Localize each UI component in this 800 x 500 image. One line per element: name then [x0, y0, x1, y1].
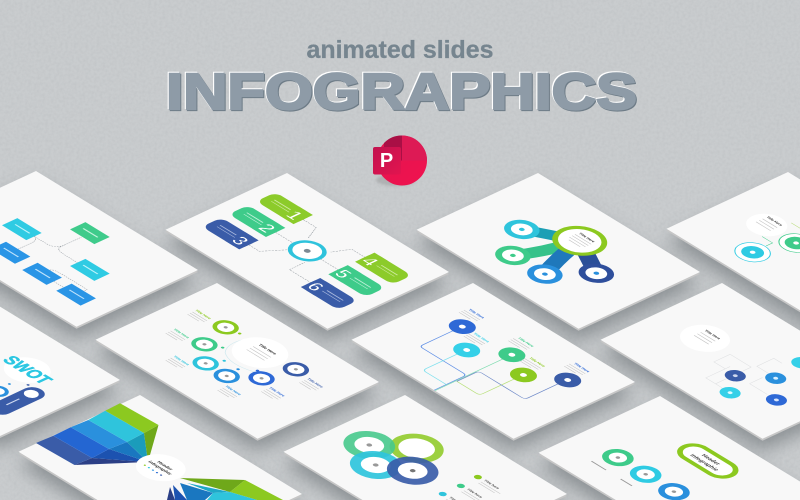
blue ring left	[0, 380, 20, 399]
icon: PowerPoint logo	[373, 135, 427, 186]
label cyan: Title Here	[172, 355, 190, 366]
lime pill heading: Header	[699, 454, 722, 467]
connector lines	[387, 323, 565, 419]
list item cyan	[434, 491, 471, 500]
list item lime	[470, 474, 506, 495]
disc navy	[376, 451, 449, 490]
label lime: Title Here	[528, 357, 546, 368]
node green	[493, 344, 531, 365]
node lime	[504, 365, 543, 385]
node blue	[520, 261, 570, 288]
pill 4: 4	[356, 254, 384, 269]
pill 1	[256, 192, 313, 224]
node cyan	[497, 216, 547, 243]
white SWOT ellipse	[0, 352, 60, 388]
center circle: Header	[156, 460, 174, 471]
label cyan	[464, 331, 490, 346]
white title ellipse: Title Here	[703, 329, 721, 340]
title: INFOGRAPHICS: INFOGRAPHICS	[165, 62, 636, 119]
list item green: Title here	[466, 488, 483, 499]
slide: metaball blob	[415, 173, 702, 331]
label lime: Title Here	[194, 309, 212, 320]
box: blue middle	[22, 263, 62, 285]
funnel left bands	[36, 403, 158, 465]
white title ellipse: Title Here	[765, 216, 783, 226]
center circle: infographic	[147, 460, 174, 476]
subtitle: animated slides: animated slides	[306, 36, 494, 64]
node cyan	[448, 340, 486, 360]
ring blue	[652, 480, 696, 500]
disc lime	[378, 428, 455, 469]
funnel left folded faces	[74, 425, 158, 465]
pill 6: 6	[302, 280, 330, 294]
disc cyan	[339, 445, 412, 485]
pill 5	[328, 265, 385, 297]
label blue	[459, 307, 485, 322]
pill 6	[300, 278, 357, 310]
title: INFOGRAPHICS: INFOGRAPHICS	[167, 64, 638, 121]
title: INFOGRAPHICS: INFOGRAPHICS	[166, 63, 637, 120]
box: cyan right	[70, 259, 110, 281]
ring green	[588, 446, 640, 473]
node lime	[207, 317, 248, 340]
label royal blue	[261, 387, 286, 401]
hub circle	[280, 236, 335, 266]
label cyan: Title Here	[472, 332, 490, 343]
node navy	[720, 368, 750, 384]
white title ellipse	[670, 319, 740, 357]
label blue: Title Here	[467, 308, 485, 319]
label green: Title Here	[517, 337, 535, 348]
node blue	[208, 364, 250, 386]
label cyan	[165, 355, 190, 369]
blob necks	[493, 220, 616, 288]
box: cyan top	[2, 218, 42, 240]
label green: Title Here	[172, 328, 190, 339]
pill 1: 1	[281, 208, 309, 222]
pill 2: 2	[254, 221, 281, 235]
pill 5: 5	[330, 267, 357, 281]
slide shadows	[0, 183, 800, 500]
icon: PowerPoint logo: P	[380, 150, 393, 172]
center circle: Title Here	[257, 343, 279, 356]
label royal blue: Title Here	[268, 387, 286, 397]
label blue	[217, 385, 242, 399]
navy pill	[0, 383, 50, 417]
node royal blue	[242, 368, 280, 388]
slide: tree with small nodes	[599, 283, 800, 441]
list item lime: Title here	[483, 479, 500, 490]
node green	[488, 242, 538, 269]
funnel right folded faces	[167, 478, 245, 500]
label lime	[519, 356, 546, 371]
label lime	[187, 309, 212, 323]
label green	[508, 336, 535, 351]
node cyan	[187, 351, 229, 373]
center circle	[220, 331, 300, 374]
box: blue left	[0, 242, 30, 264]
node cyan	[715, 385, 745, 401]
label navy	[564, 361, 591, 376]
label navy: Title Here	[573, 362, 591, 373]
label navy	[299, 378, 324, 392]
SWOT heading: SWOT	[0, 353, 58, 387]
lime pill heading	[674, 442, 742, 480]
ring cyan	[727, 239, 778, 266]
slide: timeline lines with nodes	[350, 283, 637, 441]
center circle	[126, 449, 196, 487]
node cyan top	[787, 355, 800, 371]
disc green	[333, 425, 406, 465]
ring cyan	[615, 462, 668, 490]
pill 4	[355, 253, 412, 285]
pill 2	[228, 205, 285, 237]
white title ellipse	[738, 209, 796, 241]
list item green	[453, 483, 489, 500]
lime pill heading: infographic	[688, 454, 720, 472]
slide: numbered pills with hub	[164, 173, 451, 331]
funnel right bands	[207, 480, 283, 500]
slide: SWOT	[0, 281, 122, 439]
node navy	[277, 359, 315, 379]
label navy: Title Here	[306, 378, 324, 388]
slide: radial circles with labels	[94, 283, 381, 441]
node royal blue	[762, 392, 791, 408]
main lime node	[541, 220, 619, 262]
node blue	[443, 316, 481, 337]
slide: rings top right	[665, 172, 800, 330]
node blue	[761, 370, 791, 386]
slide: funnel process	[17, 395, 304, 500]
node navy	[571, 260, 621, 287]
pill 3	[202, 218, 259, 250]
label green	[165, 328, 190, 342]
main lime node: Title Here	[578, 232, 596, 243]
slide: rings with pill heading	[537, 396, 800, 500]
box: blue right	[56, 284, 96, 306]
box: green objective	[70, 222, 110, 244]
ring green	[772, 230, 800, 256]
node green	[186, 334, 226, 356]
label blue: Title Here	[224, 385, 242, 396]
pill 3: 3	[227, 234, 254, 248]
slide: overlapping discs	[282, 395, 569, 500]
node navy	[549, 370, 587, 390]
slide: flowchart	[0, 171, 200, 329]
